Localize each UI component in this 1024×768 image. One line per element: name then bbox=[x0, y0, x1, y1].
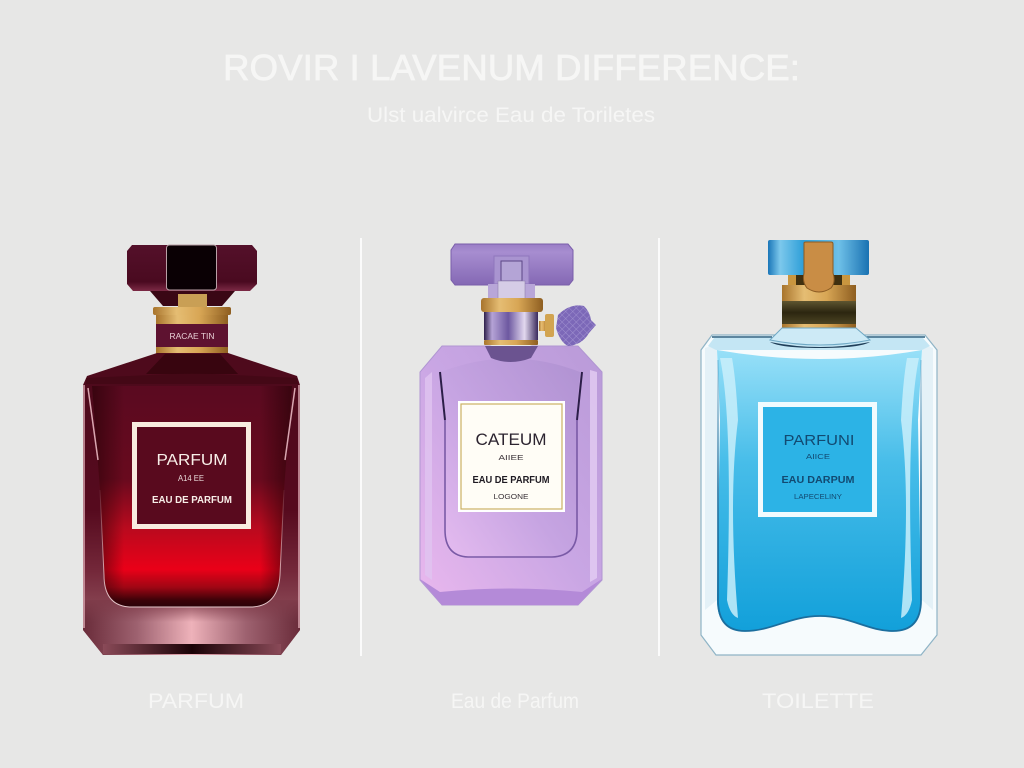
red bottle liquid bbox=[92, 386, 292, 607]
red bottle base bbox=[83, 600, 300, 655]
red bottle label: A14 EE bbox=[178, 474, 204, 483]
blue bottle top band bbox=[708, 338, 930, 350]
blue bottle gold stems bbox=[788, 275, 850, 286]
purple bottle label bbox=[458, 401, 565, 512]
blue bottle top line bbox=[712, 336, 925, 338]
red bottle label: EAU DE PARFUM bbox=[152, 494, 232, 506]
red bottle glass body bbox=[83, 353, 300, 655]
purple bottle left facet bbox=[425, 372, 432, 580]
purple atomizer bulb bbox=[556, 305, 596, 346]
purple bottle inner stem bbox=[488, 256, 535, 299]
blue bottle neck shadow bbox=[770, 342, 870, 348]
blue bottle label: PARFUNI bbox=[784, 432, 854, 449]
blue bottle gold actuator bbox=[803, 242, 834, 292]
blue bottle side tint left bbox=[705, 344, 717, 610]
caption: parfum: PARFUM bbox=[148, 690, 244, 713]
blue bottle collar bbox=[782, 285, 856, 328]
bottle: parfum (red) bbox=[83, 245, 300, 655]
purple bottle label: AIIEE bbox=[498, 453, 524, 462]
red bottle shoulder highlight bbox=[86, 373, 298, 384]
red bottle foot strip bbox=[103, 644, 281, 654]
red bottle base fade bbox=[83, 600, 300, 622]
caption: eau de parfum: Eau de Parfum bbox=[451, 690, 579, 713]
purple bottle neck shadow bbox=[485, 346, 538, 362]
blue bottle side tint right bbox=[922, 344, 933, 610]
bottle: toilette (blue) bbox=[701, 240, 937, 655]
purple bottle label: LOGONE bbox=[494, 492, 528, 501]
purple bottle label: CATEUM bbox=[476, 430, 546, 449]
blue bottle label: EAU DARPUM bbox=[782, 474, 855, 486]
red bottle gold sprayer bbox=[178, 294, 207, 308]
red bottle label bbox=[134, 424, 248, 526]
bottle: eau de parfum (purple) bbox=[420, 244, 602, 605]
purple bottle collar bbox=[481, 298, 543, 345]
red bottle label: PARFUM bbox=[156, 452, 228, 469]
blue bottle glass body bbox=[701, 335, 937, 655]
blue bottle right reflection bbox=[901, 358, 919, 618]
purple bottle glass body bbox=[420, 346, 602, 605]
subtitle: Ulst ualvirce Eau de Toriletes bbox=[367, 104, 655, 127]
red bottle shoulder shadow bbox=[146, 354, 238, 374]
title: ROVIR I LAVENUM DIFFERENCE: bbox=[223, 47, 800, 88]
blue bottle label: LAPECELINY bbox=[794, 492, 842, 501]
red bottle cap bbox=[127, 245, 257, 291]
divider left bbox=[360, 238, 362, 656]
purple bottle right facet bbox=[590, 370, 597, 582]
blue bottle liquid bbox=[717, 350, 922, 631]
purple bottle left inner edge bbox=[440, 372, 445, 420]
purple bottle right inner edge bbox=[577, 372, 582, 420]
purple bottle inner vessel bbox=[441, 358, 580, 558]
blue bottle cap bbox=[768, 240, 869, 275]
blue bottle left reflection bbox=[720, 358, 738, 618]
purple bottle cap bbox=[451, 244, 573, 285]
red bottle collar bbox=[153, 307, 231, 354]
blue bottle neck bbox=[770, 328, 870, 345]
purple bottle lower outline bbox=[445, 420, 577, 557]
purple bottle label: EAU DE PARFUM bbox=[472, 474, 550, 486]
purple atomizer connector bbox=[539, 314, 554, 337]
divider right bbox=[658, 238, 660, 656]
red bottle neck under cap bbox=[150, 291, 235, 306]
red bottle collar: RACAE TIN bbox=[170, 331, 214, 341]
blue bottle label bbox=[760, 404, 874, 514]
blue bottle label: AIICE bbox=[806, 452, 830, 461]
purple bottle lower facet bbox=[420, 579, 602, 605]
red bottle edge reflections bbox=[84, 385, 299, 628]
caption: toilette: TOILETTE bbox=[762, 690, 874, 713]
blue bottle liquid floor bbox=[718, 360, 921, 631]
